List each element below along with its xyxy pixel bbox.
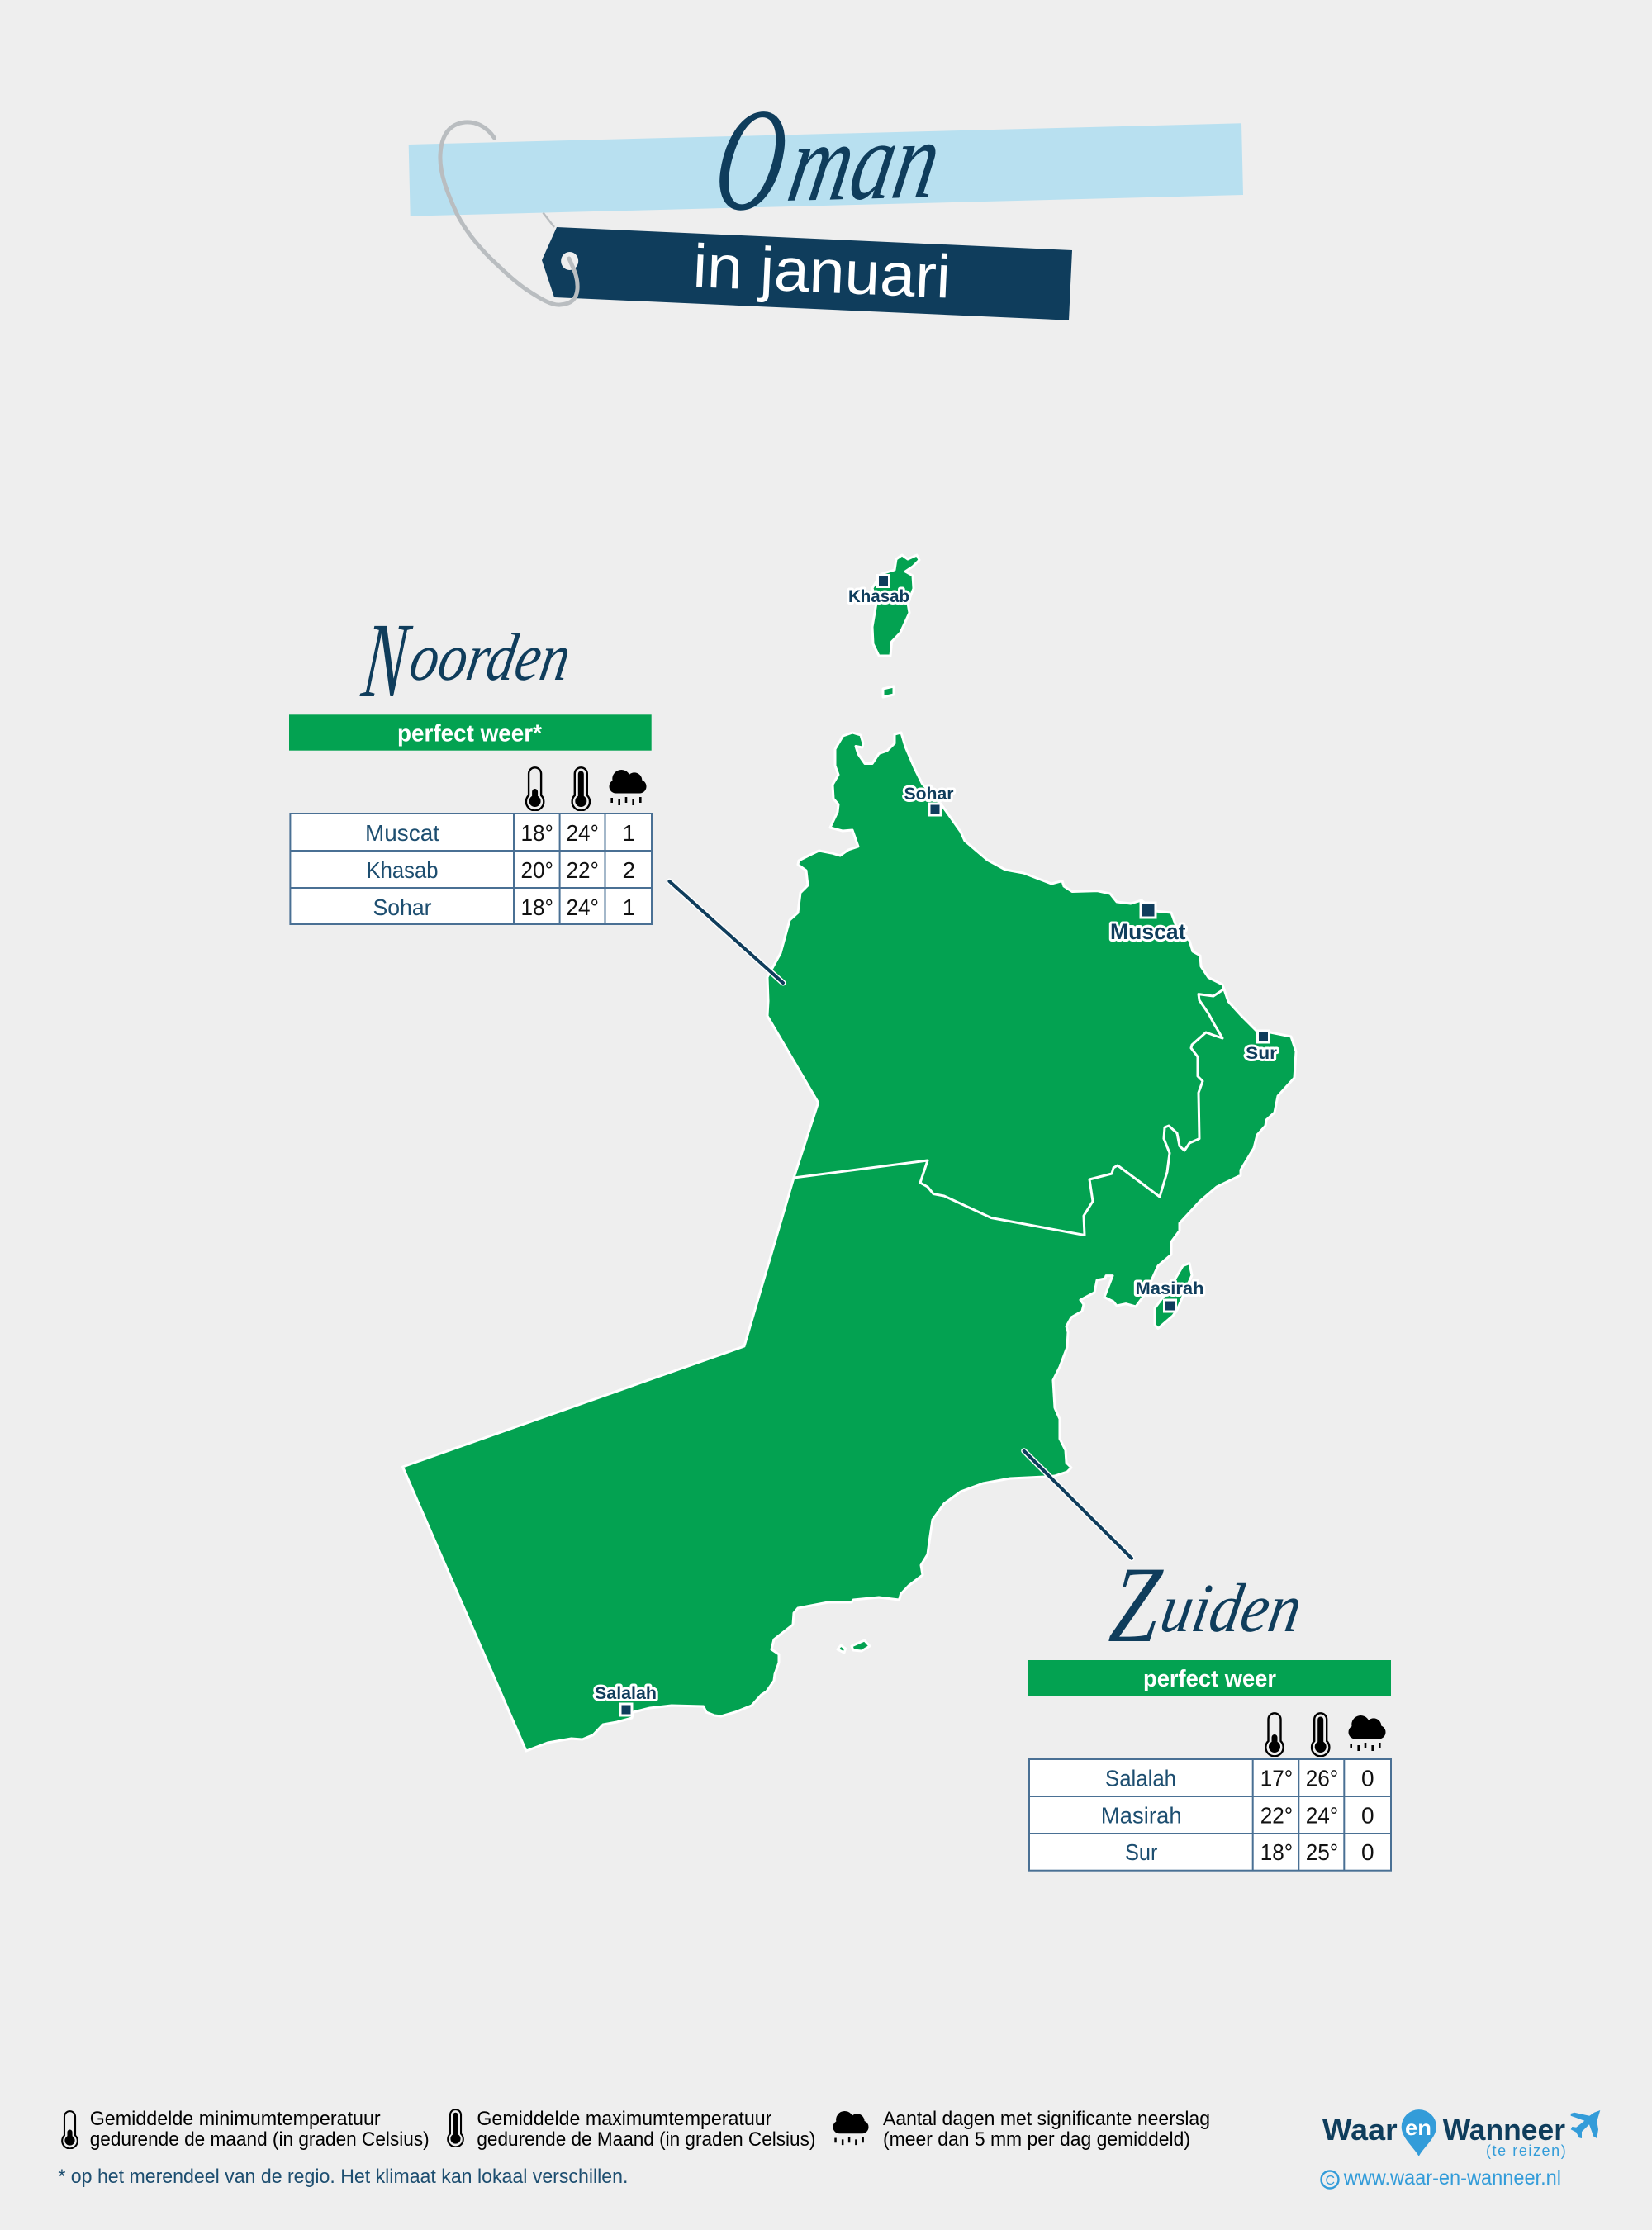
legend item: minimum temperature: [62, 2108, 430, 2151]
title: Oman: [706, 78, 950, 241]
heading: Zuiden: uiden: [1156, 1571, 1308, 1647]
footnote: * op het merendeel van de regio. Het klimaat kan lokaal verschillen.: [58, 2166, 628, 2188]
climate table: 17°: [1260, 1766, 1293, 1791]
climate table: 18°: [520, 894, 553, 920]
icon: rain: [1348, 1715, 1386, 1751]
dark tag band: [542, 227, 1072, 320]
subtitle: in januari: in januari: [691, 231, 952, 311]
climate table: [290, 814, 652, 924]
climate table: Sohar: [373, 894, 431, 920]
heading: Noorden: oorden: [405, 619, 577, 695]
legend item: maximum temperature: Gemiddelde maximumtemperatuur: [477, 2108, 771, 2130]
legend: [58, 2108, 1210, 2188]
light blue title band: [409, 123, 1243, 216]
climate table: 0: [1361, 1803, 1374, 1829]
climate table: 25°: [1306, 1839, 1338, 1865]
country shape: Khuriya Muriya islands: [838, 1640, 870, 1653]
climate table: 1: [623, 820, 635, 846]
climate table: [1029, 1759, 1391, 1871]
icon: airplane: [1571, 2110, 1600, 2138]
icon: minimum temperature: [526, 767, 544, 810]
icon: maximum temperature: [1312, 1713, 1329, 1756]
climate table: 18°: [520, 820, 553, 846]
leader line north: [669, 881, 783, 983]
climate table: 2: [623, 857, 635, 883]
climate table: 0: [1361, 1839, 1374, 1865]
logo word: Wanneer: Wanneer: [1443, 2113, 1565, 2147]
heading: Zuiden: Z: [1105, 1544, 1166, 1665]
copyright icon: [1322, 2171, 1338, 2189]
climate table: Sur: [1125, 1839, 1158, 1865]
city: Muscat: [1110, 903, 1186, 944]
status bar: perfect weer*: [397, 721, 543, 747]
climate table: Masirah: [1101, 1803, 1182, 1829]
climate table: 22°: [1260, 1803, 1293, 1829]
icon: minimum temperature: [1265, 1713, 1284, 1756]
legend item: rain days: [833, 2108, 1210, 2151]
country shape: mainland: [403, 733, 1296, 1751]
copyright icon: C: [1325, 2174, 1335, 2188]
website url: www.waar-en-wanneer.nl: [1343, 2166, 1561, 2190]
climate table: 18°: [1260, 1839, 1293, 1865]
panel: Noorden: [289, 601, 652, 924]
logo tagline: (te reizen): [1486, 2142, 1566, 2159]
regional border: [794, 989, 1225, 1236]
leader line south: [1024, 1451, 1132, 1559]
city: Muscat: Muscat: [1110, 919, 1186, 944]
city: Sohar: [904, 785, 953, 815]
country shape: Musandam: [872, 555, 919, 656]
tag string ring: [440, 122, 577, 305]
panel: Zuiden: [1028, 1544, 1391, 1871]
climate table: 26°: [1306, 1766, 1338, 1791]
climate table: 22°: [567, 857, 599, 883]
city: Sur: Sur: [1246, 1044, 1277, 1063]
icon: rain: [610, 770, 646, 805]
climate table: 24°: [567, 894, 599, 920]
title block: [409, 78, 1243, 320]
logo word: Waar: Waar: [1322, 2113, 1398, 2147]
city: Sohar: Sohar: [904, 785, 953, 804]
climate table: 0: [1361, 1766, 1374, 1791]
legend item: maximum temperature: [448, 2108, 815, 2151]
city: Sur: [1246, 1031, 1277, 1063]
legend item: rain days: Aantal dagen met significante neerslag: [883, 2108, 1210, 2130]
climate table: Khasab: [367, 857, 438, 883]
country shape: Madha exclave: [883, 686, 894, 697]
title: Oman: O: [706, 78, 796, 241]
status bar: [289, 714, 652, 751]
city: Masirah: Masirah: [1135, 1279, 1204, 1298]
title: Oman: man: [780, 97, 950, 225]
climate table: 20°: [520, 857, 553, 883]
status bar: perfect weer: [1143, 1666, 1276, 1692]
map of Oman: [403, 555, 1296, 1751]
climate table: 24°: [1306, 1803, 1338, 1829]
legend item: rain days: (meer dan 5 mm per dag gemiddeld): [883, 2128, 1190, 2151]
icon: maximum temperature: [572, 767, 590, 810]
city: Salalah: Salalah: [595, 1684, 657, 1703]
status bar: [1028, 1660, 1391, 1696]
climate table: 1: [623, 894, 635, 920]
icon: map pin: en: [1405, 2115, 1431, 2140]
heading: Noorden: N: [357, 601, 416, 720]
city: Khasab: Khasab: [848, 587, 909, 606]
heading: Zuiden: [1105, 1544, 1308, 1665]
city: Salalah: [595, 1684, 657, 1715]
climate table: Muscat: [365, 820, 439, 846]
city: Masirah: [1135, 1279, 1204, 1312]
city: Khasab: [848, 575, 909, 606]
legend item: maximum temperature: gedurende de Maand (in graden Celsius): [477, 2128, 815, 2151]
climate table: Salalah: [1105, 1766, 1176, 1791]
legend item: minimum temperature: gedurende de maand (in graden Celsius): [90, 2128, 430, 2151]
icon: map pin: [1402, 2109, 1436, 2156]
heading: Noorden: [357, 601, 577, 720]
legend item: minimum temperature: Gemiddelde minimumtemperatuur: [90, 2108, 381, 2130]
climate table: 24°: [567, 820, 599, 846]
logo: Waar en Wanneer: [1322, 2109, 1600, 2190]
ring short segment: [544, 213, 554, 227]
country shape: Masirah island: [1155, 1264, 1192, 1328]
